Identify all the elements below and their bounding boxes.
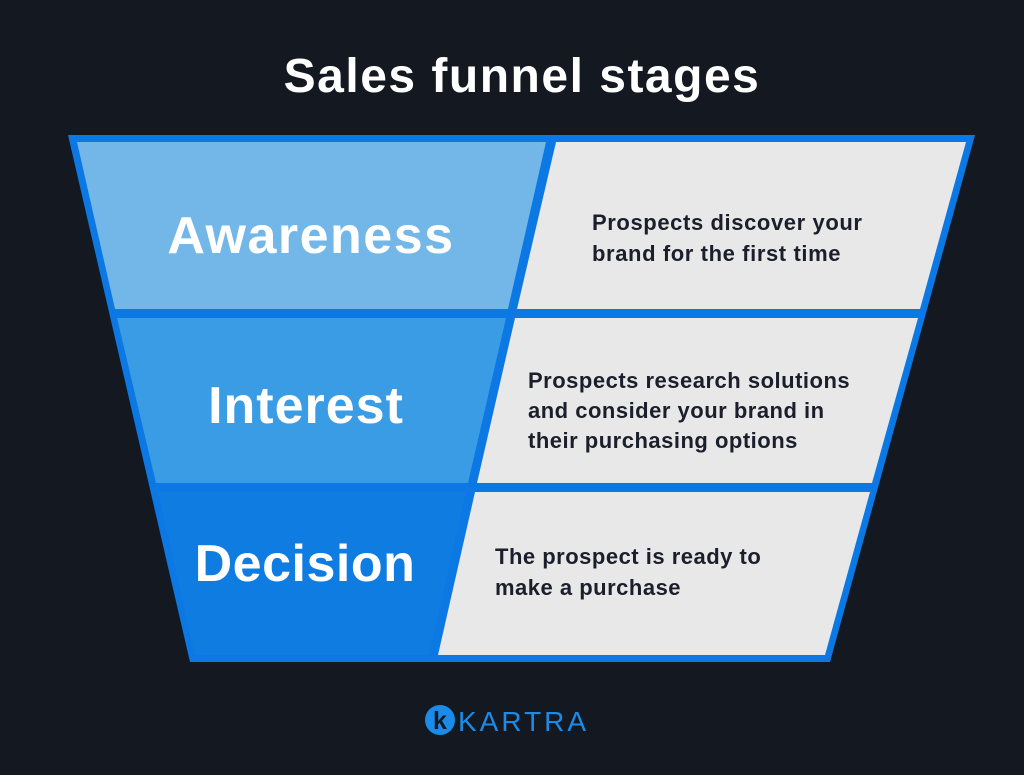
heading: awareness: Awareness bbox=[167, 207, 455, 265]
text: decision description: make a purchase bbox=[495, 575, 681, 600]
text: awareness description: brand for the first time bbox=[592, 241, 841, 266]
heading: interest: Interest bbox=[208, 377, 404, 435]
title: Sales funnel stages bbox=[284, 50, 760, 103]
text: interest description: Prospects research solutions bbox=[528, 368, 850, 393]
funnel bbox=[68, 135, 975, 662]
logo: kartra: KARTRA bbox=[458, 706, 589, 737]
logo: kartra: k bbox=[433, 707, 447, 735]
text: awareness description: Prospects discover your bbox=[592, 210, 863, 235]
text: interest description: and consider your brand in bbox=[528, 398, 825, 423]
heading: decision: Decision bbox=[195, 535, 415, 593]
text: interest description: their purchasing options bbox=[528, 428, 798, 453]
panel: decision bbox=[158, 492, 870, 655]
panel: interest bbox=[117, 318, 918, 483]
panel: awareness bbox=[77, 142, 966, 309]
text: decision description: The prospect is ready to bbox=[495, 544, 761, 569]
